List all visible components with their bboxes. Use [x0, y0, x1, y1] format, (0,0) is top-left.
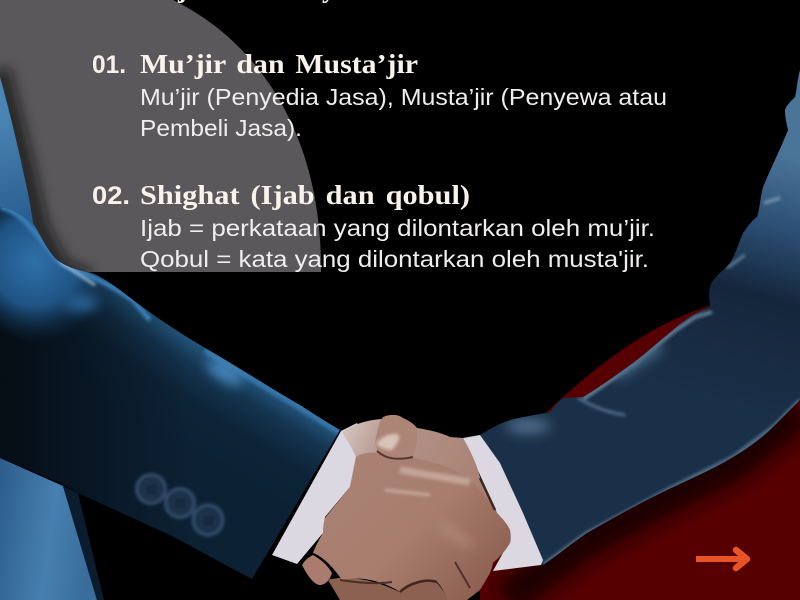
item 02: [92, 180, 655, 272]
sleeve buttons: [136, 474, 223, 535]
item 01: [92, 49, 667, 141]
handshake: [302, 415, 511, 600]
right sleeve: [480, 70, 800, 565]
lower fingers: [328, 578, 447, 600]
shadow under right arm: [505, 410, 800, 600]
left jacket body lower: [0, 458, 104, 600]
wrist and back hand: [342, 419, 495, 510]
panel: dark red circle: [480, 296, 800, 600]
panel: grey quarter circle: [0, 0, 321, 272]
arrow icon: [696, 550, 747, 568]
number 01: 01.: [92, 51, 126, 79]
shadow beside left jacket: [0, 70, 90, 280]
heading 01: Mu’jir dan Musta’jir: [140, 49, 418, 79]
front hand: [313, 453, 511, 600]
number 02: 02.: [92, 182, 130, 210]
left jacket strip: [0, 77, 33, 223]
left sleeve: [0, 207, 340, 579]
body 01 line 2: Pembeli Jasa).: [140, 115, 302, 141]
small finger behind: [302, 555, 332, 585]
body 02 line 1: Ijab = perkataan yang dilontarkan oleh mu’jir.: [140, 215, 655, 241]
thumb highlight: [376, 434, 399, 450]
body 02 line 2: Qobul = kata yang dilontarkan oleh musta'jir.: [140, 246, 649, 272]
body 01 line 1: Mu’jir (Penyedia Jasa), Musta’jir (Penyewa atau: [140, 84, 667, 110]
thumb: [375, 415, 417, 461]
knuckle highlights and creases: [340, 451, 495, 592]
left shirt cuff: [272, 423, 366, 564]
heading 02: Shighat (Ijab dan qobul): [140, 180, 470, 210]
right shirt cuff: [463, 435, 543, 571]
